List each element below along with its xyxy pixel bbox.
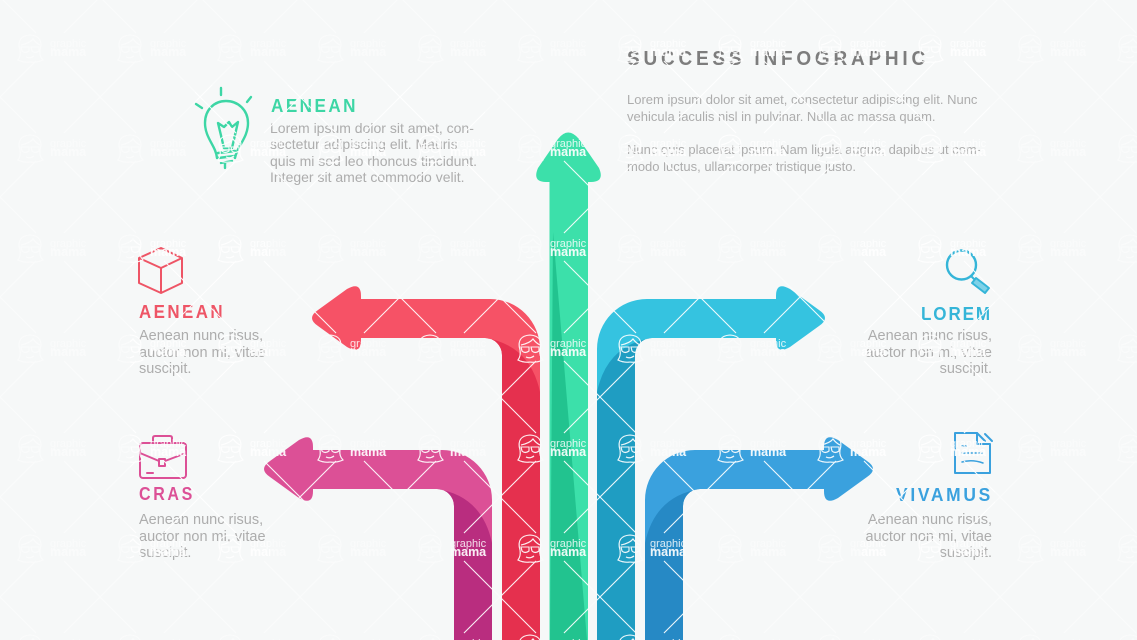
text: aenean green (270, 120, 477, 185)
icon: light bulb (196, 88, 251, 168)
intro text: modo luctus, ullamcorper tristique justo. (627, 159, 856, 174)
text: aenean red: suscipit. (139, 361, 191, 377)
text: cras: auctor non mi, vitae (139, 529, 266, 545)
text: lorem: suscipit. (940, 361, 992, 377)
text: vivamus: Aenean nunc risus, (868, 512, 992, 528)
text: aenean red: Aenean nunc risus, (139, 328, 263, 344)
arrow: red left (312, 286, 540, 640)
text: aenean red: auctor non mi, vitae (139, 345, 266, 361)
heading: cras: CRAS (139, 484, 195, 504)
heading: aenean green: AENEAN (271, 96, 358, 116)
icon: cube (139, 248, 182, 293)
intro text: Lorem ipsum dolor sit amet, consectetur adipiscing elit. Nunc (627, 92, 978, 107)
text: aenean green: Integer sit amet commodo velit. (270, 169, 465, 185)
text: cras: Aenean nunc risus, (139, 512, 263, 528)
arrow: blue right (645, 437, 873, 640)
text: aenean green: sectetur adipiscing elit. Mauris (270, 136, 458, 152)
arrow: cyan right (597, 286, 825, 640)
icon: magnifier (947, 250, 989, 293)
heading: aenean red: AENEAN (139, 302, 225, 322)
text: lorem: Aenean nunc risus, (868, 328, 992, 344)
text: vivamus (865, 512, 992, 561)
text: lorem: auctor non mi, vitae (865, 345, 992, 361)
icon: briefcase (140, 436, 186, 478)
heading: vivamus: VIVAMUS (896, 485, 993, 505)
text: aenean green: quis mi sed leo rhoncus tincidunt. (270, 153, 477, 169)
text: vivamus: suscipit. (940, 545, 992, 561)
title: SUCCESS INFOGRAPHIC (627, 48, 929, 70)
icon: document (955, 433, 992, 473)
arrow: green up (536, 132, 601, 640)
text: cras: suscipit. (139, 545, 191, 561)
intro text: Nunc quis placerat ipsum. Nam ligula augue, dapibus ut com- (627, 142, 981, 157)
intro text: vehicula iaculis nisl in pulvinar. Nulla ac massa quam. (627, 109, 936, 124)
intro text (627, 92, 981, 174)
watermark overlay (133, 51, 990, 640)
heading: lorem: LOREM (921, 304, 992, 324)
text: vivamus: auctor non mi, vitae (865, 529, 992, 545)
text: lorem (865, 328, 992, 377)
text: cras (139, 512, 266, 561)
arrow: pink left (264, 437, 492, 640)
text: aenean green: Lorem ipsum dolor sit amet, con- (270, 120, 474, 136)
text: aenean red (139, 328, 266, 377)
